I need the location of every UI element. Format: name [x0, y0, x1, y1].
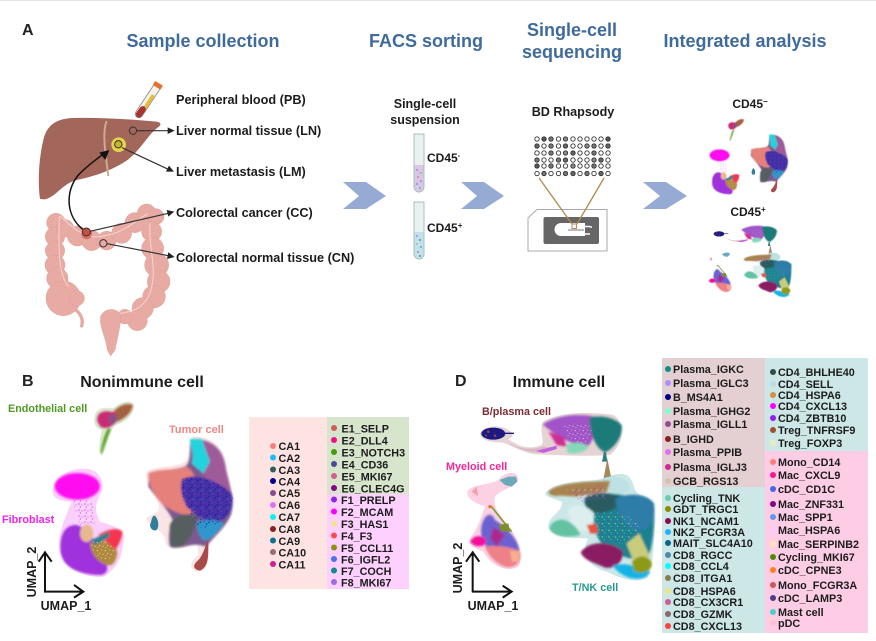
halos: immune compartments: [467, 413, 655, 580]
legend group: B and plasma clusters: B_IGHD: [673, 434, 714, 446]
legend group: myeloid clusters: pDC: [778, 618, 800, 630]
icon: blood tube: [139, 83, 159, 114]
label: UMAP 1: UMAP_1: [41, 599, 91, 613]
icon: metastasis spot: [111, 137, 126, 152]
panel B label: B: [22, 373, 34, 390]
panel D label: D: [455, 373, 467, 390]
heading: integrated analysis: Integrated analysis: [663, 31, 827, 51]
label: UMAP 2 immune: UMAP_2: [451, 543, 465, 593]
label: integrated CD45 negative: CD45: [732, 97, 763, 111]
legend group: endothelial clusters: E6_CLEC4G: [342, 484, 405, 496]
legend group: myeloid clusters: cDC_CD1C: [778, 484, 835, 496]
label: colorectal normal tissue: Colorectal normal tissue (CN): [176, 251, 354, 265]
heading: nonimmune cell: Nonimmune cell: [80, 374, 204, 391]
legend panel: immune clusters: [662, 358, 868, 633]
legend group: T and NK clusters: CD8_HSPA6: [673, 586, 736, 598]
arrow: metastasis path: [69, 150, 109, 229]
legend group: fibroblast clusters: F6_IGFL2: [341, 554, 390, 566]
legend group: fibroblast clusters: F8_MKI67: [341, 578, 391, 590]
label: peripheral blood: Peripheral blood (PB): [176, 93, 306, 107]
legend group: endothelial clusters: E5_MKI67: [342, 472, 393, 484]
heading: FACS sorting: FACS sorting: [369, 31, 483, 51]
label: integrated CD45 positive: +: [761, 205, 766, 214]
legend group: T and NK clusters: GDT_TRGC1: [673, 504, 738, 516]
legend group: CA tumor clusters: CA11: [278, 560, 306, 572]
label: liver normal tissue: Liver normal tissue (LN): [176, 124, 321, 138]
axes: UMAP arrows: [39, 552, 83, 598]
legend group: B and plasma clusters: Plasma_IGKC: [673, 364, 744, 376]
legend group: myeloid clusters: Mac_HSPA6: [778, 525, 840, 537]
legend group: T and NK clusters: Cycling_TNK: [673, 493, 740, 505]
legend group: CA tumor clusters: CA3: [278, 465, 300, 477]
icon: colon: [45, 204, 170, 356]
clusters: immune cells: [470, 415, 654, 579]
arrow: to colorectal cancer: [90, 210, 174, 231]
legend group: myeloid clusters: cDC_LAMP3: [778, 593, 842, 605]
legend group: B and plasma clusters: Plasma_PPIB: [673, 447, 742, 459]
legend group: myeloid clusters: Mast cell: [778, 607, 824, 619]
legend group: myeloid clusters: Mac_CXCL9: [778, 470, 840, 482]
heading: immune cell: Immune cell: [513, 374, 605, 391]
legend group: myeloid clusters: Cycling_MKI67: [778, 552, 855, 564]
label: UMAP 1 immune: UMAP_1: [468, 599, 518, 613]
legend group: CD4 clusters: CD4_HSPA6: [778, 390, 841, 402]
legend group: myeloid clusters: Mono_FCGR3A: [778, 580, 857, 592]
heading: single-cell sequencing: sequencing: [522, 42, 622, 62]
legend group: fibroblast clusters: F7_COCH: [341, 566, 392, 578]
legend group: fibroblast clusters: F3_HAS1: [341, 519, 388, 531]
arrow: chevron 2: [461, 182, 504, 209]
axes: UMAP arrows: [466, 552, 512, 598]
arrow: to colorectal normal: [107, 244, 175, 259]
heading: single-cell sequencing: Single-cell: [527, 20, 617, 40]
legend group: myeloid clusters: [770, 457, 859, 630]
legend group: fibroblast clusters: F1_PRELP: [341, 495, 396, 507]
legend group: T and NK clusters: CD8_CCL4: [673, 561, 729, 573]
legend group: CD4 clusters: CD4_SELL: [778, 379, 834, 391]
legend group: T and NK clusters: CD8_CXCL13: [673, 621, 742, 633]
label: tumor cell: Tumor cell: [169, 424, 224, 436]
legend group: T and NK clusters: NK2_FCGR3A: [673, 527, 745, 539]
legend group: myeloid clusters: Mac_ZNF331: [778, 499, 844, 511]
legend group: endothelial clusters: E4_CD36: [342, 460, 388, 472]
clusters: nonimmune cells: [55, 404, 233, 575]
legend group: CA tumor clusters: CA5: [278, 488, 300, 500]
icon: colorectal normal marker: [100, 240, 107, 247]
chart: small CD45 positive UMAP: [708, 226, 791, 297]
icon: CD45 positive tube: [414, 202, 424, 259]
label: integrated CD45 positive: CD45: [730, 205, 761, 219]
legend group: B and plasma clusters: Plasma_IGLL1: [673, 419, 747, 431]
label: CD45 positive: +: [458, 221, 463, 230]
icon: cartridge: [528, 178, 607, 251]
legend group: myeloid clusters: cDC_CPNE3: [778, 565, 842, 577]
label: single-cell suspension: Single-cell: [394, 97, 456, 111]
chart: nonimmune UMAP: [39, 402, 233, 598]
legend group: fibroblast clusters: F4_F3: [341, 531, 372, 543]
legend group: CD4 clusters: [770, 367, 855, 450]
top rule: [0, 0, 876, 1]
legend group: endothelial clusters: E1_SELP: [342, 424, 389, 436]
legend group: CA tumor clusters: CA7: [278, 512, 300, 524]
halos: nonimmune compartments: [53, 402, 233, 577]
legend group: CD4 clusters: CD4_ZBTB10: [778, 413, 846, 425]
legend group: myeloid clusters: Mono_CD14: [778, 457, 840, 469]
heading: sample collection: Sample collection: [126, 31, 280, 51]
chart: immune UMAP: [466, 413, 655, 598]
legend group: CA tumor clusters: CA2: [278, 453, 300, 465]
label: endothelial cell: Endothelial cell: [8, 403, 87, 415]
legend group: T and NK clusters: MAIT_SLC4A10: [673, 538, 753, 550]
arrow: to liver normal: [137, 127, 175, 134]
legend group: endothelial clusters: E2_DLL4: [342, 436, 388, 448]
label: integrated CD45 negative: −: [763, 97, 768, 106]
label: CD45 negative: -: [458, 153, 461, 160]
icon: liver: [39, 118, 160, 199]
icon: liver normal marker: [129, 127, 137, 134]
label: UMAP 2: UMAP_2: [25, 547, 39, 597]
legend group: T and NK clusters: [665, 493, 753, 633]
legend group: T and NK clusters: CD8_ITGA1: [673, 573, 732, 585]
legend group: B and plasma clusters: GCB_RGS13: [673, 476, 738, 488]
legend panel: nonimmune clusters: [249, 417, 409, 590]
legend group: endothelial clusters: [331, 424, 405, 496]
arrow: chevron 1: [343, 182, 386, 209]
label: fibroblast: Fibroblast: [2, 514, 55, 526]
legend group: T and NK clusters: NK1_NCAM1: [673, 516, 739, 528]
legend group: CA tumor clusters: CA1: [278, 441, 300, 453]
legend group: CA tumor clusters: CA9: [278, 536, 300, 548]
legend group: CA tumor clusters: CA4: [278, 476, 300, 488]
icon: CD45 negative tube: [414, 134, 424, 192]
label: B/plasma cell: B/plasma cell: [482, 406, 551, 418]
illustration: organs and sample sites: [39, 83, 175, 356]
label: T/NK cell: T/NK cell: [572, 582, 618, 594]
legend group: B and plasma clusters: B_MS4A1: [673, 392, 723, 404]
arrow: chevron 3: [643, 182, 687, 209]
legend group: T and NK clusters: CD8_CX3CR1: [673, 597, 743, 609]
legend group: B and plasma clusters: [665, 364, 750, 488]
chart: small CD45 negative UMAP: [710, 119, 788, 194]
label: liver metastasis: Liver metastasis (LM): [176, 165, 306, 179]
legend group: endothelial clusters: E3_NOTCH3: [342, 448, 405, 460]
panel A label: A: [22, 22, 34, 39]
legend group: fibroblast clusters: F2_MCAM: [341, 507, 393, 519]
label: single-cell suspension: suspension: [390, 113, 460, 127]
label: CD45 positive: CD45: [427, 221, 458, 235]
legend group: CA tumor clusters: [270, 441, 306, 572]
legend group: B and plasma clusters: Plasma_IGLC3: [673, 378, 749, 390]
legend group: B and plasma clusters: Plasma_IGLJ3: [673, 462, 747, 474]
legend group: T and NK clusters: CD8_GZMK: [673, 609, 733, 621]
legend group: CA tumor clusters: CA6: [278, 500, 300, 512]
legend group: B and plasma clusters: Plasma_IGHG2: [673, 406, 750, 418]
legend group: myeloid clusters: Mac_SERPINB2: [778, 539, 859, 551]
icon: microwell grid: [535, 137, 610, 176]
label: colorectal cancer: Colorectal cancer (CC): [176, 206, 313, 220]
arrow: to liver metastasis: [122, 148, 174, 172]
legend group: CA tumor clusters: CA8: [278, 524, 300, 536]
icon: tumour spot: [81, 228, 92, 239]
legend group: CD4 clusters: CD4_CXCL13: [778, 401, 847, 413]
legend group: CD4 clusters: Treg_TNFRSF9: [778, 425, 855, 437]
legend group: CA tumor clusters: CA10: [278, 548, 306, 560]
legend group: myeloid clusters: Mac_SPP1: [778, 512, 833, 524]
label: myeloid cell: Myeloid cell: [446, 461, 507, 473]
label: BD Rhapsody: BD Rhapsody: [532, 105, 614, 119]
legend group: fibroblast clusters: F5_CCL11: [341, 543, 393, 555]
legend group: CD4 clusters: CD4_BHLHE40: [778, 367, 855, 379]
legend group: CD4 clusters: Treg_FOXP3: [778, 438, 842, 450]
label: CD45 negative: CD45: [427, 151, 458, 165]
legend group: fibroblast clusters: [331, 495, 396, 590]
legend group: T and NK clusters: CD8_RGCC: [673, 550, 733, 562]
